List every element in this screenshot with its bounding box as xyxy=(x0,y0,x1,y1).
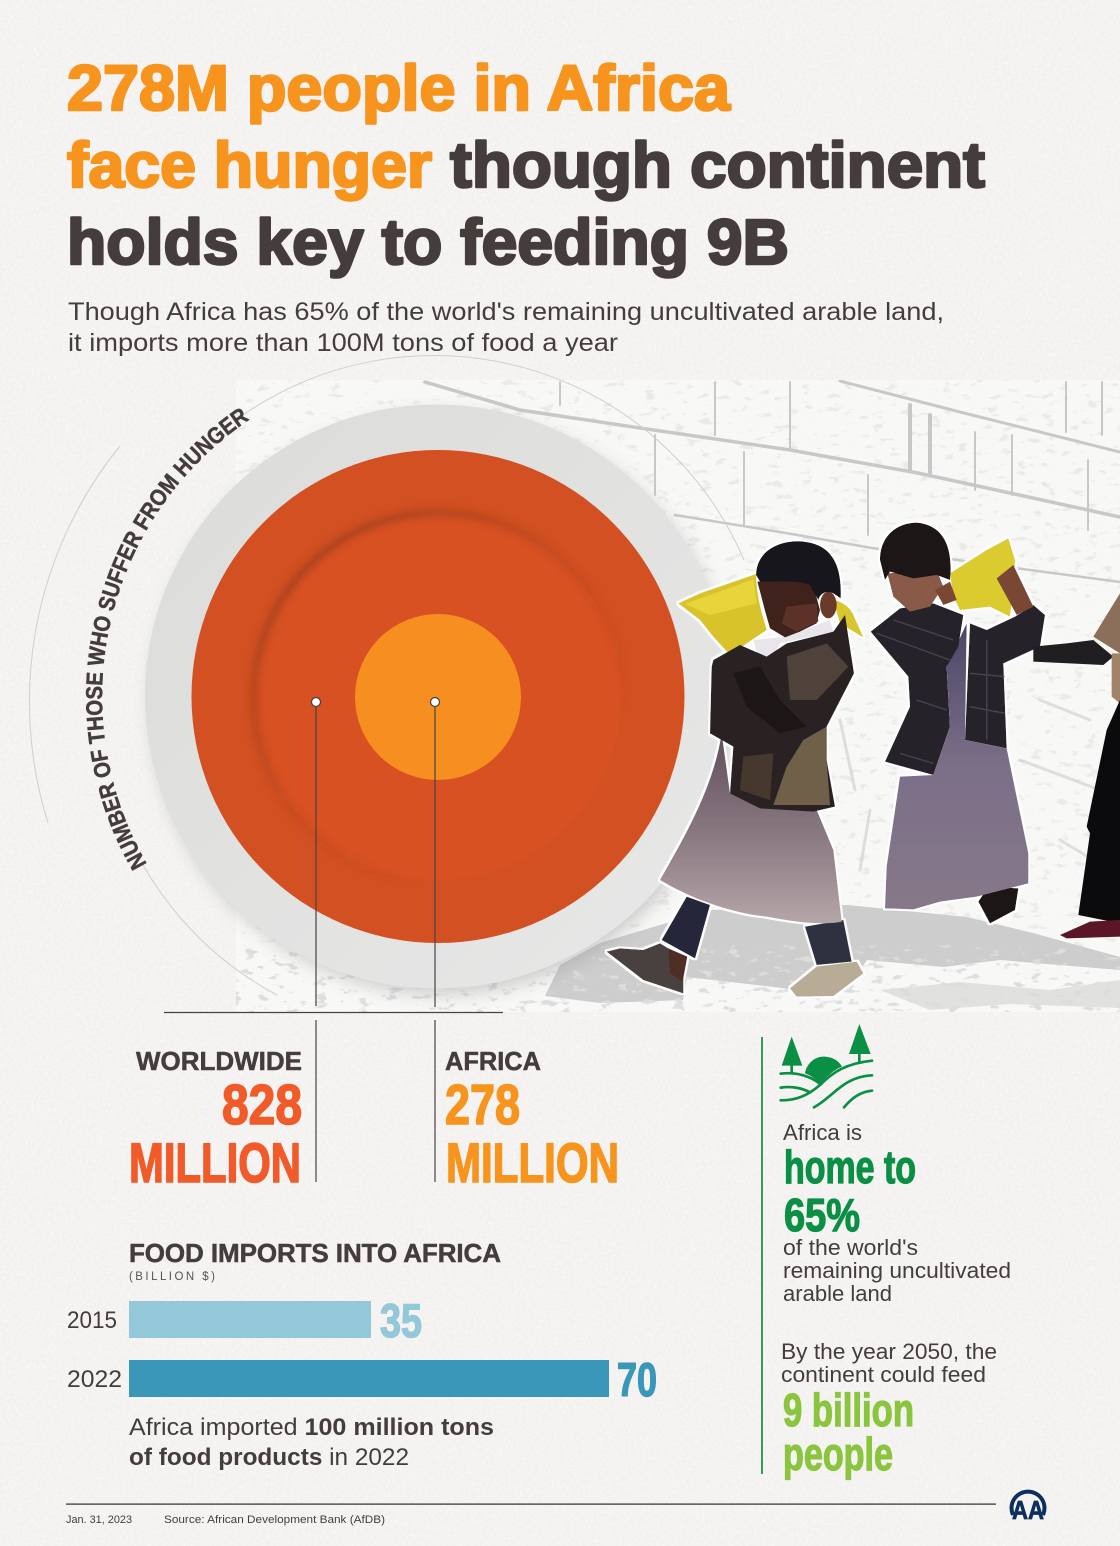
chart unit: (BILLION $) xyxy=(129,1271,215,1283)
child two xyxy=(871,523,1045,923)
callout: 65 percent of land: 65% xyxy=(784,1189,860,1241)
title xyxy=(67,52,985,278)
stat: africa: AFRICA xyxy=(445,1046,541,1076)
child one xyxy=(607,541,863,997)
callout: 65 percent of land xyxy=(783,1120,1011,1306)
callout: 9 billion people: By the year 2050, the xyxy=(781,1339,997,1364)
footer date and source xyxy=(66,1514,385,1526)
plate well shading xyxy=(254,513,622,881)
bar 2015: 2015 xyxy=(67,1307,117,1334)
child three, partly cropped xyxy=(1033,593,1120,938)
title: 278M people in Africa xyxy=(67,52,730,124)
stat: worldwide: MILLION xyxy=(129,1131,301,1194)
plate rim xyxy=(145,404,729,988)
curved label: NUMBER OF THOSE WHO SUFFER FROM HUNGER xyxy=(86,408,250,871)
bar 2015 xyxy=(67,1294,422,1347)
chart heading: FOOD IMPORTS INTO AFRICA xyxy=(129,1238,501,1268)
plate well xyxy=(255,514,621,880)
stat: worldwide xyxy=(129,1046,302,1194)
stat: worldwide: WORLDWIDE xyxy=(136,1046,302,1076)
callout: 9 billion people: people xyxy=(783,1428,893,1480)
stat: africa xyxy=(445,1046,619,1194)
imports note xyxy=(129,1414,494,1471)
icon: farmland with trees and sun xyxy=(781,1024,872,1107)
africa circle: 278 million xyxy=(355,614,521,780)
callout lines and markers xyxy=(164,698,503,1182)
footer rule xyxy=(66,1504,996,1505)
bar 2022: 2022 xyxy=(67,1366,122,1393)
subtitle: it imports more than 100M tons of food a year xyxy=(68,329,618,357)
thin arc guides xyxy=(29,356,744,995)
callout: 9 billion people: continent could feed xyxy=(781,1362,986,1387)
photo backdrop: stone wall and ground xyxy=(236,380,1120,1012)
title: though continent xyxy=(450,129,985,201)
stat: africa: MILLION xyxy=(446,1131,619,1194)
subtitle xyxy=(68,298,944,357)
callout: 65 percent of land: Africa is xyxy=(783,1120,862,1145)
title: face hunger xyxy=(67,129,432,201)
callout: 65 percent of land: of the world's xyxy=(783,1235,918,1260)
imports note: of food products in 2022 xyxy=(129,1444,409,1471)
stat: worldwide: 828 xyxy=(222,1073,302,1137)
callout: 9 billion people: 9 billion xyxy=(783,1384,914,1436)
plate shadow xyxy=(152,414,732,994)
bar 2022: 70 xyxy=(617,1353,657,1406)
footer date and source: Source: African Development Bank (AfDB) xyxy=(164,1514,385,1526)
bar 2015: 35 xyxy=(380,1294,422,1347)
bar 2022 xyxy=(67,1353,657,1406)
plate chart xyxy=(145,404,732,994)
right column divider xyxy=(761,1037,763,1474)
footer date and source: Jan. 31, 2023 xyxy=(66,1514,132,1526)
logo: AA: AA xyxy=(1012,1495,1044,1525)
imports note: Africa imported 100 million tons xyxy=(129,1414,494,1441)
subtitle: Though Africa has 65% of the world's remaining uncultivated arable land, xyxy=(68,298,944,326)
stat: africa: 278 xyxy=(445,1073,520,1137)
callout: 65 percent of land: remaining uncultivated xyxy=(783,1258,1011,1283)
callout: 65 percent of land: home to xyxy=(784,1141,916,1193)
callout: 9 billion people xyxy=(781,1339,997,1480)
callout: 65 percent of land: arable land xyxy=(783,1281,892,1306)
title: holds key to feeding 9B xyxy=(67,206,789,278)
children carrying sacks xyxy=(607,523,1120,997)
bar chart: food imports xyxy=(67,1238,657,1406)
worldwide circle: 828 million xyxy=(192,450,684,943)
